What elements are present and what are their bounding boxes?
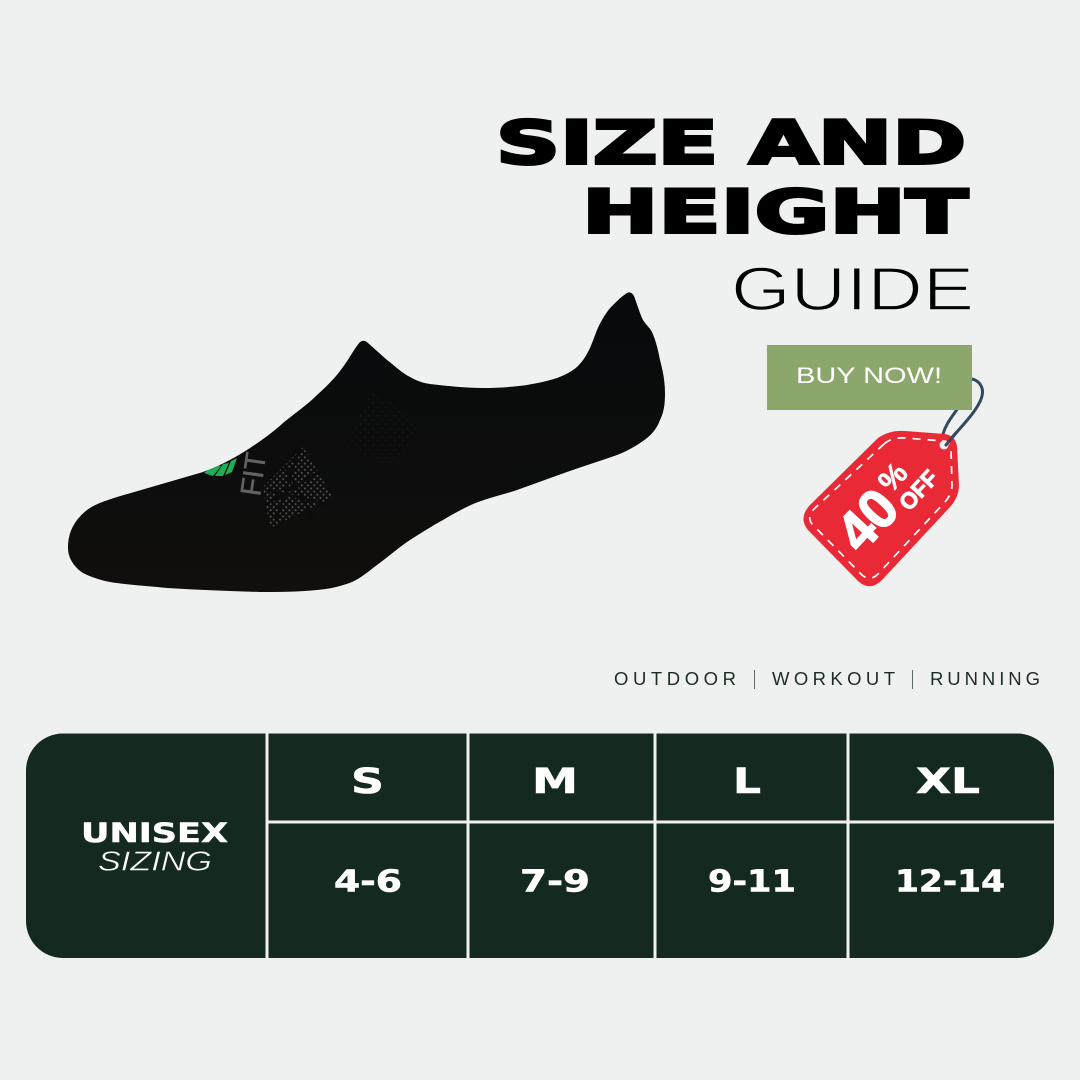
logo leaf — [204, 458, 237, 476]
title line: guide: GUIDE — [731, 255, 974, 323]
tag label: 40: 40 — [824, 476, 911, 563]
table background — [26, 734, 1054, 958]
table grid lines — [267, 733, 1054, 958]
tag body — [803, 431, 959, 586]
tagline: separator — [912, 670, 913, 689]
row label: unisex sizing — [81, 818, 228, 876]
title line: size and: SIZE AND — [496, 108, 966, 178]
size table — [26, 733, 1054, 958]
tag label: percent: % — [872, 457, 915, 499]
tag hole — [940, 440, 948, 450]
button label: BUY NOW! — [796, 363, 942, 388]
header: m: M — [532, 762, 578, 802]
label: sizing: SIZING — [98, 846, 212, 876]
size headers — [351, 762, 980, 802]
tagline: workout: WORKOUT — [772, 668, 895, 689]
size ranges — [334, 864, 1005, 900]
header: s: S — [351, 762, 384, 802]
tag stitching — [810, 438, 952, 578]
sock faint upper mesh — [345, 388, 420, 470]
range: 4-6: 4-6 — [334, 864, 402, 900]
title — [496, 108, 974, 323]
logo wordmark: FIT — [235, 450, 273, 498]
tag string behind button — [943, 379, 983, 443]
string over tag — [946, 433, 956, 445]
product photo: black no-show sock — [68, 292, 665, 592]
tagline: running: RUNNING — [930, 668, 1040, 689]
tagline: outdoor: OUTDOOR — [614, 668, 736, 689]
title line: height: HEIGHT — [582, 178, 968, 248]
buy now button — [767, 345, 972, 410]
range: 9-11: 9-11 — [708, 864, 796, 900]
tag label: off: OFF — [894, 465, 943, 515]
tagline: separator — [754, 670, 755, 689]
sock logo — [204, 452, 266, 495]
sock mesh panel — [263, 447, 333, 528]
header: l: L — [733, 762, 761, 802]
label: unisex: UNISEX — [81, 818, 228, 849]
sock silhouette — [68, 292, 665, 592]
discount price tag — [803, 431, 959, 586]
header: xl: XL — [916, 762, 980, 802]
range: 7-9: 7-9 — [520, 864, 590, 900]
range: 12-14: 12-14 — [895, 864, 1005, 900]
tagline — [614, 668, 1040, 689]
